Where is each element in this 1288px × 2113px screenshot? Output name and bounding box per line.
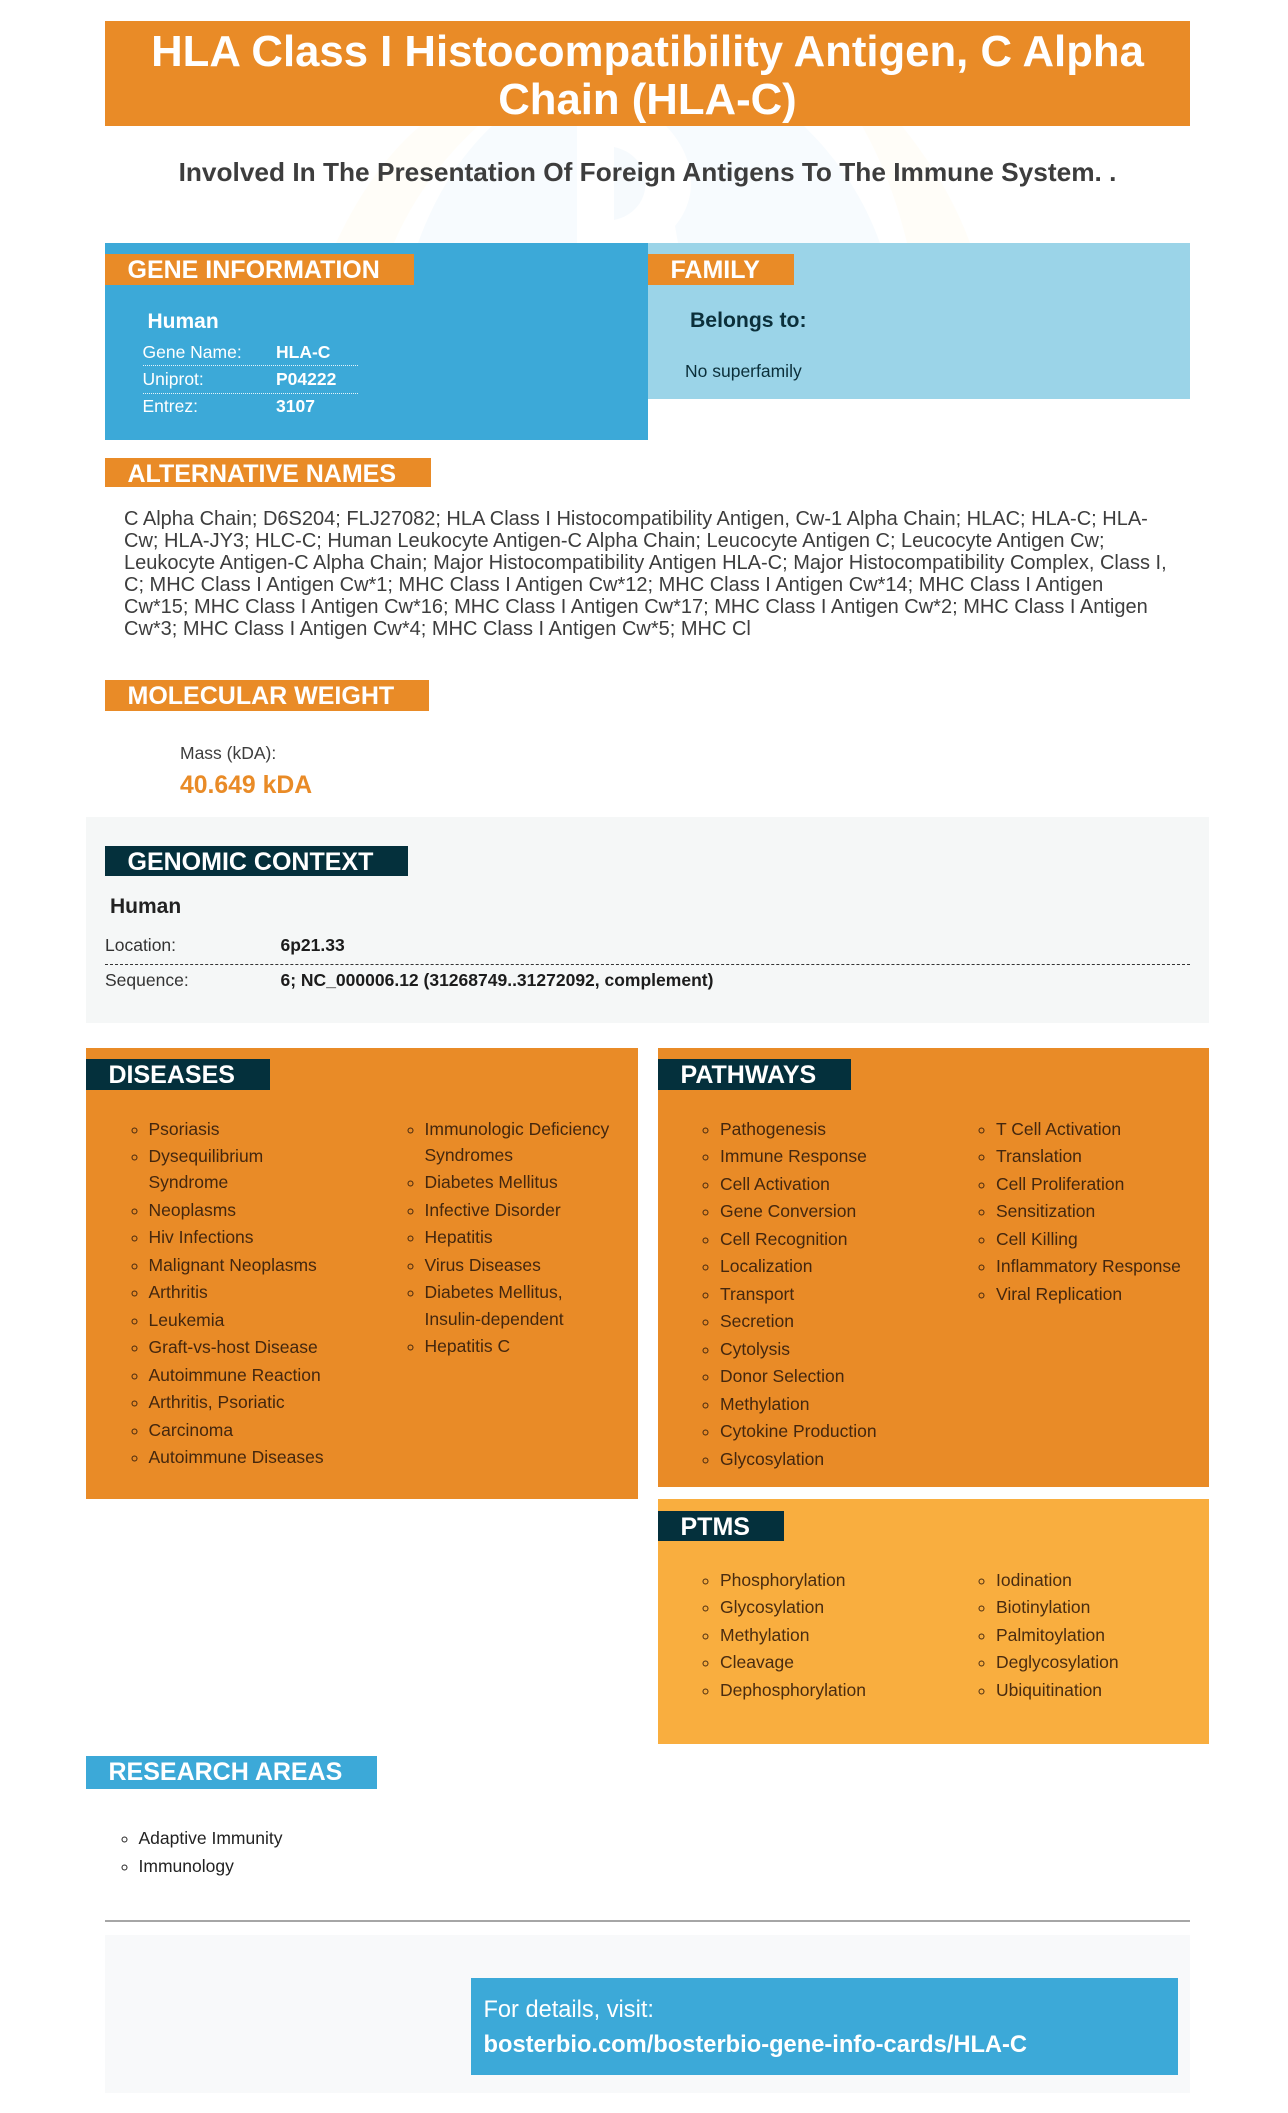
panel: pathways bbox=[658, 1048, 1209, 1487]
alternative names text: Cw*15; MHC Class I Antigen Cw*16; MHC Class I Antigen Cw*17; MHC Class I Antigen Cw*2; MHC Class I Antigen bbox=[124, 596, 1148, 618]
diseases list column 2: Infective Disorder bbox=[424, 1200, 561, 1220]
alternative names text: Leukocyte Antigen-C Alpha Chain; Major Histocompatibility Antigen HLA-C; Major Histocompatibility Complex, Class I, bbox=[124, 552, 1167, 574]
diseases list column 2: Diabetes Mellitus, bbox=[424, 1282, 563, 1302]
ptms list column 2: Deglycosylation bbox=[996, 1652, 1119, 1672]
belongs to label: Belongs to: bbox=[690, 309, 807, 332]
pathways list column 1: Pathogenesis bbox=[720, 1119, 826, 1139]
pathways list column 1: Gene Conversion bbox=[720, 1201, 856, 1221]
pathways list column 2: Sensitization bbox=[996, 1201, 1095, 1221]
heading: family: FAMILY bbox=[670, 256, 760, 284]
species label: Human bbox=[110, 895, 181, 918]
location row: Location: bbox=[105, 935, 176, 955]
ptms list column 2 bbox=[978, 1570, 1119, 1700]
diseases list column 1: Autoimmune Reaction bbox=[148, 1365, 321, 1385]
location row bbox=[105, 933, 1190, 965]
title banner bbox=[105, 21, 1190, 126]
diseases list column 2: Syndromes bbox=[424, 1145, 513, 1165]
diseases list column 1: Leukemia bbox=[148, 1310, 224, 1330]
ptms list column 2: Ubiquitination bbox=[996, 1680, 1102, 1700]
alternative names text: Cw*3; MHC Class I Antigen Cw*4; MHC Class I Antigen Cw*5; MHC Cl bbox=[124, 618, 751, 640]
diseases list column 2: Hepatitis bbox=[424, 1227, 493, 1247]
pathways list column 1: Glycosylation bbox=[720, 1449, 824, 1469]
ptms list column 2: Palmitoylation bbox=[996, 1625, 1105, 1645]
diseases list column 1: Neoplasms bbox=[148, 1200, 236, 1220]
sequence row: Sequence: bbox=[105, 970, 189, 990]
pathways list column 1: Cell Activation bbox=[720, 1174, 830, 1194]
pathways list column 2 bbox=[978, 1119, 1181, 1304]
title banner: Chain (HLA-C) bbox=[498, 75, 797, 124]
heading: alternative names: ALTERNATIVE NAMES bbox=[128, 460, 396, 488]
subtitle: Involved In The Presentation Of Foreign Antigens To The Immune System. . bbox=[179, 157, 1116, 187]
diseases list column 1 bbox=[132, 1118, 324, 1467]
diseases list column 1: Dysequilibrium bbox=[148, 1146, 263, 1166]
heading: research areas: RESEARCH AREAS bbox=[108, 1758, 342, 1786]
diseases list column 1: Arthritis bbox=[148, 1282, 208, 1302]
panel: family bbox=[648, 243, 1190, 399]
link text: bosterbio.com/bosterbio-gene-info-cards/HLA-C bbox=[484, 2032, 1027, 2058]
ptms list column 1: Phosphorylation bbox=[720, 1570, 846, 1590]
heading: ptms: PTMS bbox=[680, 1513, 750, 1541]
diseases list column 1: Hiv Infections bbox=[148, 1227, 254, 1247]
pathways list column 1: Cytolysis bbox=[720, 1339, 790, 1359]
research areas list: Adaptive Immunity bbox=[138, 1828, 282, 1848]
uniprot row: P04222 bbox=[276, 369, 336, 389]
pathways list column 1 bbox=[702, 1119, 877, 1469]
panel: genomic context bbox=[86, 817, 1209, 1023]
heading: ptms bbox=[658, 1511, 784, 1541]
mass label: Mass (kDA): bbox=[180, 743, 276, 763]
diseases list column 1: Graft-vs-host Disease bbox=[148, 1337, 318, 1357]
visit label: For details, visit: bbox=[484, 1997, 654, 2023]
gene name row: Gene Name: bbox=[142, 342, 242, 362]
pathways list column 2: Viral Replication bbox=[996, 1284, 1122, 1304]
mass value: 40.649 kDA bbox=[180, 772, 312, 799]
heading: research areas bbox=[86, 1756, 377, 1789]
entrez row: Entrez: bbox=[142, 396, 198, 416]
sequence row: 6; NC_000006.12 (31268749..31272092, complement) bbox=[280, 970, 713, 990]
pathways list column 1: Localization bbox=[720, 1256, 812, 1276]
diseases list column 1: Syndrome bbox=[148, 1172, 228, 1192]
alternative names text: C; MHC Class I Antigen Cw*1; MHC Class I Antigen Cw*12; MHC Class I Antigen Cw*14; MHC Class I Antigen bbox=[124, 574, 1103, 596]
diseases list column 1: Carcinoma bbox=[148, 1420, 233, 1440]
heading: pathways bbox=[658, 1059, 851, 1090]
uniprot row: Uniprot: bbox=[142, 369, 204, 389]
uniprot row bbox=[142, 368, 358, 394]
species label: Human bbox=[148, 310, 219, 333]
panel: gene information bbox=[105, 243, 648, 440]
ptms list column 1: Dephosphorylation bbox=[720, 1680, 866, 1700]
gene name row bbox=[142, 340, 358, 366]
entrez row bbox=[142, 396, 315, 416]
alternative names text bbox=[124, 508, 1167, 640]
diseases list column 1: Autoimmune Diseases bbox=[148, 1447, 324, 1467]
callout: details link bbox=[471, 1978, 1178, 2075]
location row: 6p21.33 bbox=[280, 935, 345, 955]
panel: ptms bbox=[658, 1499, 1209, 1744]
ptms list column 1: Cleavage bbox=[720, 1652, 794, 1672]
background watermark logo bbox=[614, 148, 646, 220]
diseases list column 1: Psoriasis bbox=[148, 1118, 220, 1138]
ptms list column 2: Iodination bbox=[996, 1570, 1072, 1590]
pathways list column 1: Secretion bbox=[720, 1311, 794, 1331]
heading: family bbox=[648, 254, 794, 285]
pathways list column 2: Cell Proliferation bbox=[996, 1174, 1124, 1194]
heading: molecular weight: MOLECULAR WEIGHT bbox=[128, 682, 394, 710]
heading: genomic context: GENOMIC CONTEXT bbox=[128, 848, 373, 876]
family value: No superfamily bbox=[685, 361, 802, 381]
heading: gene information: GENE INFORMATION bbox=[128, 256, 380, 284]
pathways list column 2: Cell Killing bbox=[996, 1229, 1078, 1249]
diseases list column 2: Diabetes Mellitus bbox=[424, 1172, 558, 1192]
pathways list column 1: Immune Response bbox=[720, 1146, 867, 1166]
pathways list column 2: Inflammatory Response bbox=[996, 1256, 1181, 1276]
diseases list column 2: Hepatitis C bbox=[424, 1336, 510, 1356]
research areas list bbox=[122, 1828, 282, 1876]
diseases list column 1: Arthritis, Psoriatic bbox=[148, 1392, 285, 1412]
research areas list: Immunology bbox=[138, 1856, 234, 1876]
diseases list column 2: Insulin-dependent bbox=[424, 1309, 564, 1329]
pathways list column 1: Cytokine Production bbox=[720, 1421, 877, 1441]
heading: diseases: DISEASES bbox=[108, 1061, 235, 1089]
ptms list column 1: Methylation bbox=[720, 1625, 810, 1645]
alternative names text: Cw; HLA-JY3; HLC-C; Human Leukocyte Antigen-C Alpha Chain; Leucocyte Antigen C; Leucocyte Antigen Cw; bbox=[124, 530, 1105, 552]
footer divider bbox=[105, 1920, 1190, 1922]
panel: footer bbox=[105, 1935, 1190, 2093]
pathways list column 1: Transport bbox=[720, 1284, 794, 1304]
entrez row: 3107 bbox=[276, 396, 315, 416]
pathways list column 2: Translation bbox=[996, 1146, 1082, 1166]
heading: diseases bbox=[86, 1059, 270, 1090]
pathways list column 1: Methylation bbox=[720, 1394, 810, 1414]
ptms list column 1 bbox=[702, 1570, 866, 1700]
diseases list column 2: Virus Diseases bbox=[424, 1255, 541, 1275]
pathways list column 1: Cell Recognition bbox=[720, 1229, 847, 1249]
ptms list column 2: Biotinylation bbox=[996, 1597, 1090, 1617]
diseases list column 1: Malignant Neoplasms bbox=[148, 1255, 317, 1275]
title banner: HLA Class I Histocompatibility Antigen, C Alpha bbox=[151, 27, 1144, 76]
diseases list column 2: Immunologic Deficiency bbox=[424, 1118, 609, 1138]
panel: diseases bbox=[86, 1048, 638, 1499]
pathways list column 1: Donor Selection bbox=[720, 1366, 845, 1386]
gene name row: HLA-C bbox=[276, 342, 330, 362]
heading: pathways: PATHWAYS bbox=[680, 1061, 816, 1089]
alternative names text: C Alpha Chain; D6S204; FLJ27082; HLA Class I Histocompatibility Antigen, Cw-1 Alpha Chain; HLAC; HLA-C; HLA- bbox=[124, 508, 1148, 530]
pathways list column 2: T Cell Activation bbox=[996, 1119, 1121, 1139]
diseases list column 2 bbox=[408, 1118, 610, 1356]
ptms list column 1: Glycosylation bbox=[720, 1597, 824, 1617]
